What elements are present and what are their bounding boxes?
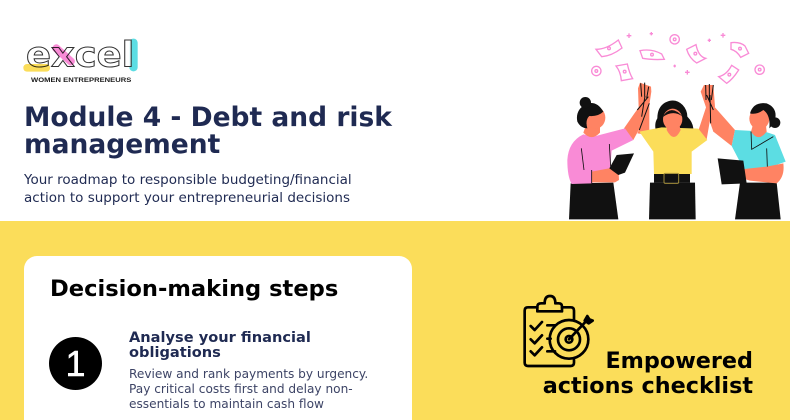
subtitle xyxy=(24,172,352,206)
callout: empowered actions checklist: Empowered xyxy=(605,348,753,374)
panel heading: Decision-making steps xyxy=(50,276,338,302)
step 1 description: Pay critical costs first and delay non- xyxy=(129,382,353,396)
step 1 description: essentials to maintain cash flow xyxy=(129,397,324,411)
logo: excel women entrepreneurs: excel xyxy=(26,35,134,75)
figure: woman in teal xyxy=(706,103,786,219)
subtitle: action to support your entrepreneurial decisions xyxy=(24,190,350,206)
step 1 description: Review and rank payments by urgency. xyxy=(129,367,368,381)
figure: woman in pink xyxy=(567,83,651,219)
illustration: three women high-fiving under falling money xyxy=(567,32,786,220)
step 1 number badge: 1 xyxy=(65,343,86,384)
icon: clipboard with target xyxy=(523,294,594,368)
yellow lower band xyxy=(0,221,790,420)
step 1 number badge xyxy=(49,337,102,390)
subtitle: Your roadmap to responsible budgeting/financial xyxy=(24,172,352,188)
title xyxy=(24,102,392,160)
callout: empowered actions checklist: actions checklist xyxy=(543,373,753,399)
title: management xyxy=(24,129,220,160)
logo: excel women entrepreneurs: WOMEN ENTREPRENEURS xyxy=(31,77,132,84)
figure: woman in yellow xyxy=(637,85,715,219)
step 1 heading xyxy=(129,329,311,361)
panel: decision-making steps xyxy=(24,256,412,420)
callout: empowered actions checklist xyxy=(543,348,753,399)
title: Module 4 - Debt and risk xyxy=(24,102,392,133)
step 1 description xyxy=(129,367,368,411)
icon: falling money xyxy=(592,32,764,83)
icon: clasped hands xyxy=(637,83,713,130)
step 1 heading: Analyse your financial xyxy=(129,329,311,346)
step 1 heading: obligations xyxy=(129,344,221,361)
